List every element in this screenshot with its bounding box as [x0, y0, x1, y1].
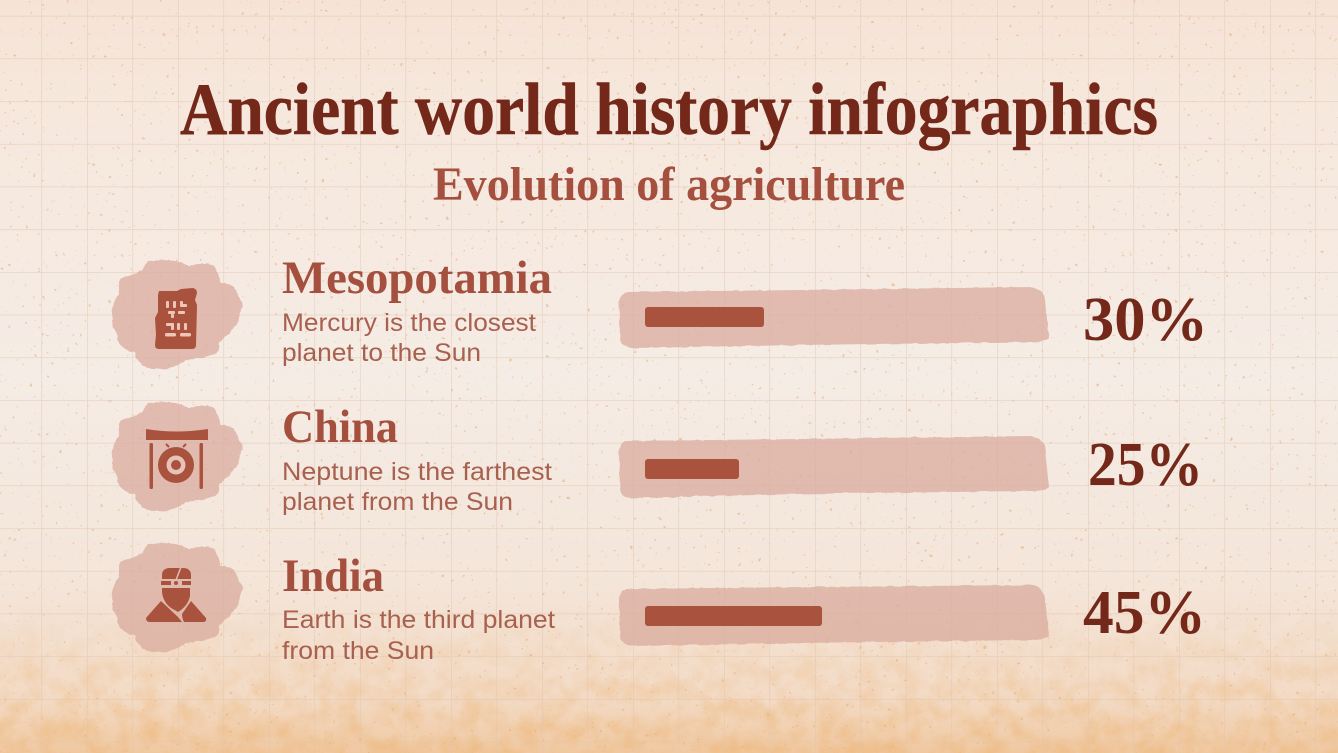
description: planet to the Sun: [282, 339, 481, 367]
icon: clay tablet on brush blob: [112, 260, 241, 369]
heading: China: [282, 401, 398, 453]
icon: person with headband on brush blob: [112, 543, 241, 652]
progress bar 25%: [619, 436, 1049, 498]
progress bar 45%: [619, 585, 1049, 646]
subtitle: Evolution of agriculture: [433, 158, 905, 211]
row: China: [112, 401, 1203, 516]
value: 30%: [1083, 286, 1208, 354]
progress bar 30%: [619, 287, 1049, 348]
heading: India: [282, 550, 384, 602]
description: planet from the Sun: [282, 488, 513, 516]
heading: Mesopotamia: [282, 252, 552, 304]
description: Mercury is the closest: [282, 309, 536, 337]
title: Ancient world history infographics: [180, 69, 1158, 151]
description: Neptune is the farthest: [282, 458, 552, 486]
value: 45%: [1083, 579, 1206, 647]
value: 25%: [1088, 431, 1203, 499]
description: from the Sun: [282, 637, 434, 665]
row: Mesopotamia: [112, 252, 1208, 369]
description: Earth is the third planet: [282, 606, 555, 634]
icon: gong on brush blob: [112, 402, 241, 511]
row: India: [112, 543, 1206, 665]
